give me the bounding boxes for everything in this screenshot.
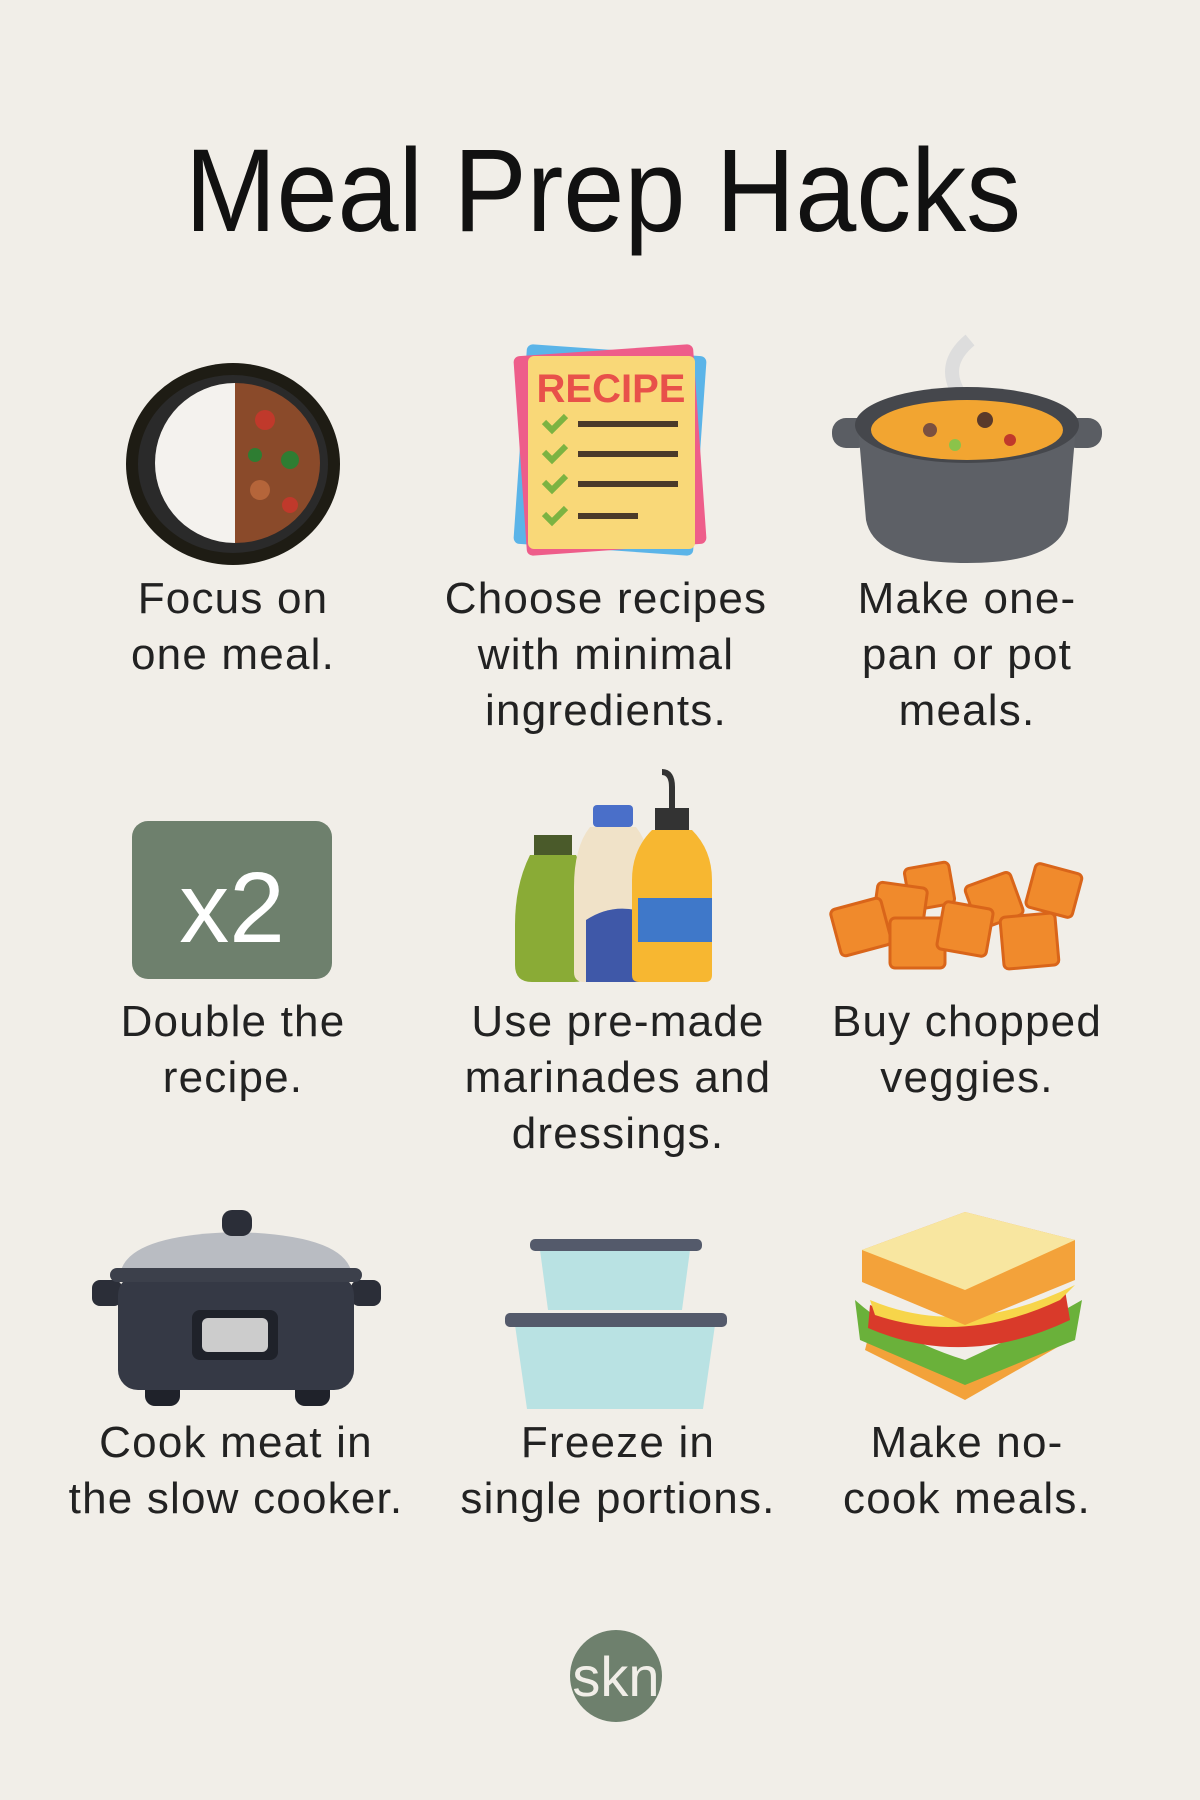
text: double recipe: Double the xyxy=(121,997,345,1046)
icon: containers xyxy=(505,1239,727,1409)
icon: rice bowl xyxy=(126,363,340,565)
text: pre-made: dressings. xyxy=(512,1109,724,1158)
text: one pan: Make one- xyxy=(858,574,1076,623)
icon: bottles xyxy=(515,772,712,982)
text: chopped veggies: Buy chopped xyxy=(832,997,1102,1046)
text: choose recipes: with minimal xyxy=(477,630,734,679)
text: freeze: single portions. xyxy=(460,1474,776,1523)
text: slow cooker: the slow cooker. xyxy=(69,1474,403,1523)
icon: sandwich xyxy=(855,1212,1082,1400)
icon: slow cooker xyxy=(92,1210,381,1406)
text: freeze: Freeze in xyxy=(521,1418,715,1467)
text: pre-made: Use pre-made xyxy=(471,997,765,1046)
text: focus on one meal: Focus on xyxy=(138,574,328,623)
text: no-cook: cook meals. xyxy=(843,1474,1091,1523)
text: choose recipes: ingredients. xyxy=(485,686,727,735)
text: double recipe: recipe. xyxy=(163,1053,303,1102)
icon: x2: x2 xyxy=(179,852,285,964)
icon: pot xyxy=(832,340,1102,563)
text: focus on one meal: one meal. xyxy=(131,630,335,679)
icon: recipe: RECIPE xyxy=(537,367,685,411)
text: chopped veggies: veggies. xyxy=(880,1053,1054,1102)
text: slow cooker: Cook meat in xyxy=(99,1418,373,1467)
title: Meal Prep Hacks xyxy=(185,125,1021,257)
text: one pan: pan or pot xyxy=(862,630,1072,679)
text: choose recipes: Choose recipes xyxy=(445,574,767,623)
text: no-cook: Make no- xyxy=(870,1418,1064,1467)
icon: recipe xyxy=(513,344,707,556)
icon: x2 xyxy=(132,821,332,979)
text: pre-made: marinades and xyxy=(465,1053,771,1102)
logo xyxy=(570,1630,662,1722)
logo: skn xyxy=(572,1645,660,1708)
icon: chopped veggies xyxy=(830,861,1083,969)
text: one pan: meals. xyxy=(899,686,1035,735)
